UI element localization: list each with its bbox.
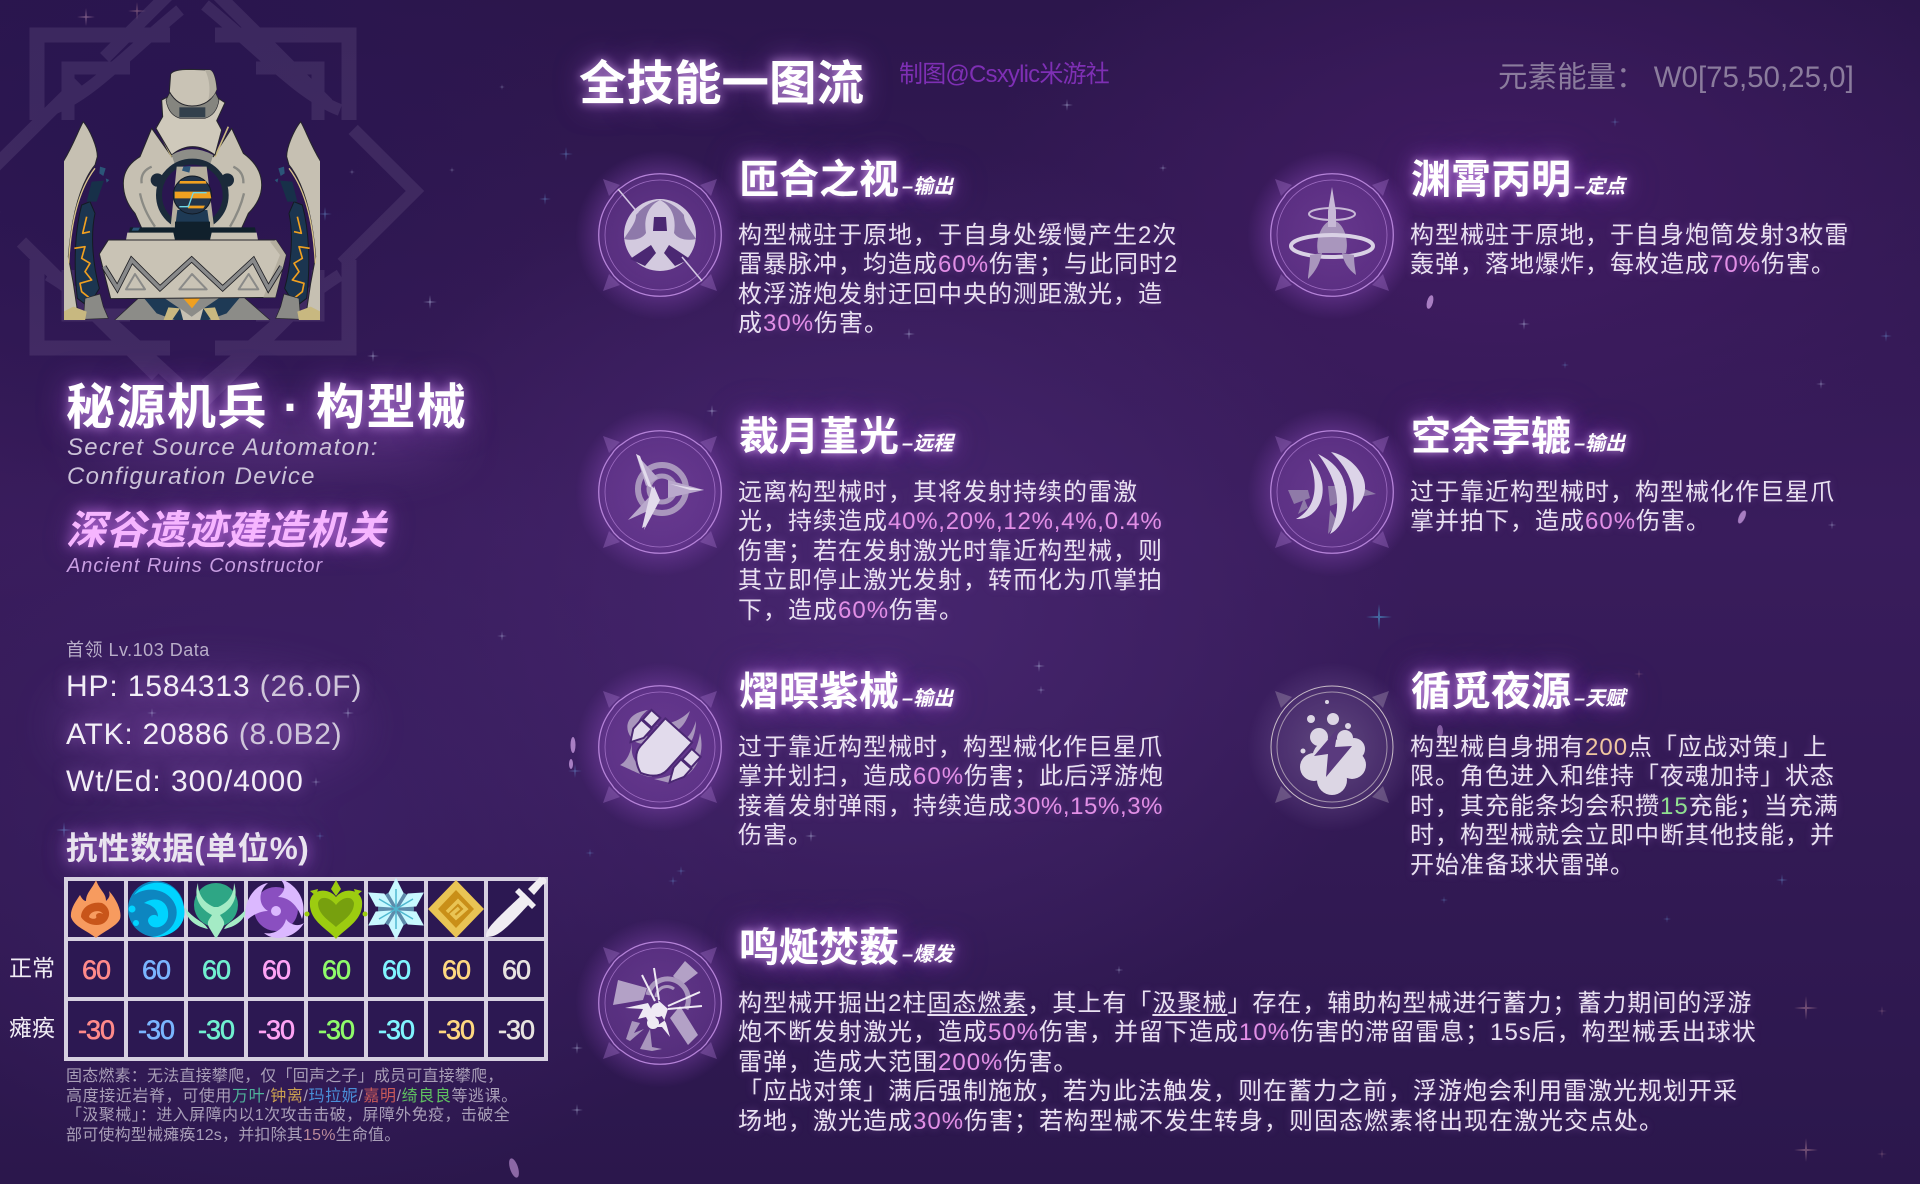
- skill description: 成30%伤害。: [738, 310, 889, 337]
- icon: anemo: [185, 883, 247, 939]
- resistance values: -30: [378, 1015, 414, 1045]
- skill name: 循觅夜源–天赋: [1411, 670, 1625, 714]
- footnote about fuel pillars: 固态燃素：无法直接攀爬，仅「回声之子」成员可直接攀爬，: [66, 1068, 503, 1085]
- boss portrait: configuration device: [64, 68, 320, 320]
- english boss name: Secret Source Automaton:: [67, 434, 379, 461]
- boss stats block: [64, 640, 542, 938]
- icon: skill 5: [1254, 157, 1410, 313]
- icon: physical sword: [486, 877, 546, 937]
- skill description: 接着发射弹雨，持续造成30%,15%,3%: [738, 793, 1163, 820]
- footnote about fuel pillars: 高度接近岩脊，可使用万叶/钟离/玛拉妮/嘉明/绮良良等逃课。: [66, 1088, 518, 1105]
- resistance values: -30: [438, 1015, 474, 1045]
- boss name heading: 秘源机兵 · 构型械: [66, 381, 468, 435]
- skill description: 伤害；若在发射激光时靠近构型械，则: [738, 538, 1163, 565]
- skill description: 掌并划扫，造成60%伤害；此后浮游炮: [738, 763, 1164, 790]
- weight and endurance: Wt/Ed: 300/4000: [66, 765, 304, 798]
- skill description: [1410, 222, 1849, 278]
- skill description: 时，其充能条均会积攒15充能；当充满: [1410, 793, 1839, 820]
- skill panel: 熠暝紫械: [582, 657, 1164, 849]
- soft nebula patches: [60, 410, 460, 866]
- hp: HP: 1584313 (26.0F): [66, 670, 362, 703]
- resistance values: -30: [138, 1015, 174, 1045]
- skill panel: 匝合之视: [581, 146, 1382, 337]
- skill description: 构型械自身拥有200点「应战对策」上: [1410, 734, 1828, 761]
- skill panel: 裁月堇光: [582, 173, 1382, 778]
- author credit: 制图@Csxylic米游社: [899, 61, 1109, 88]
- skill description: 过于靠近构型械时，构型械化作巨星爪: [738, 734, 1163, 761]
- icon: hydro: [128, 881, 184, 937]
- resistance values: 60: [142, 955, 170, 985]
- skill description: [738, 734, 1164, 849]
- skill name: 鸣烻焚薮–爆发: [739, 926, 953, 970]
- skill panel: 渊霄丙明: [1254, 144, 1849, 313]
- skill description: 光，持续造成40%,20%,12%,4%,0.4%: [738, 508, 1162, 535]
- resistance values: -30: [198, 1015, 234, 1045]
- icon: dendro: [304, 880, 368, 939]
- neck and head: [156, 95, 225, 155]
- resistance values: 60: [262, 955, 290, 985]
- resistance values: 60: [502, 955, 530, 985]
- skill description: 轰弹，落地爆炸，每枚造成70%伤害。: [1410, 251, 1836, 278]
- skill description: 远离构型械时，其将发射持续的雷激: [738, 479, 1138, 506]
- base collar: [127, 222, 257, 240]
- skill panel: 循觅夜源: [1262, 659, 1902, 859]
- icon: cryo: [369, 879, 423, 939]
- skill description: 伤害。: [738, 822, 813, 849]
- row label: normal: 正常: [9, 955, 55, 981]
- central ring: [172, 149, 213, 165]
- resistance values: 60: [382, 955, 410, 985]
- english boss name: [67, 434, 379, 490]
- skill name: 渊霄丙明–定点: [1411, 158, 1625, 202]
- atk: ATK: 20886 (8.0B2): [66, 718, 342, 751]
- row label: paralyzed: 瘫痪: [9, 1015, 55, 1041]
- resistance values: 60: [322, 955, 350, 985]
- skill description: [738, 222, 1178, 337]
- main title: 全技能一图流: [579, 58, 864, 111]
- skill description: 构型械开掘出2柱固态燃素，其上有「汲聚械」存在，辅助构型械进行蓄力；蓄力期间的浮游: [738, 990, 1752, 1017]
- skill description: 掌并拍下，造成60%伤害。: [1410, 508, 1711, 535]
- icon: skill 1: [581, 156, 1368, 313]
- icon: skill 6: [1254, 414, 1410, 570]
- resistance table: [64, 877, 548, 1061]
- boss subtitle: 深谷遗迹建造机关: [66, 509, 386, 553]
- icon: skill 2: [582, 414, 737, 569]
- skill name: 匝合之视–输出: [739, 158, 953, 202]
- skill description: [1410, 478, 1835, 537]
- icon: skill 4: [581, 925, 739, 1082]
- english subtitle: Ancient Ruins Constructor: [67, 555, 323, 577]
- skill description: 炮不断发射激光，造成50%伤害，并留下造成10%伤害的滞留雷息；15s后，构型械丢出球状: [738, 1019, 1757, 1046]
- resistance values: 60: [202, 955, 230, 985]
- elemental energy note: 元素能量： W0[75,50,25,0]: [1498, 61, 1854, 94]
- lower base: [114, 297, 271, 321]
- resistance values: -30: [498, 1015, 534, 1045]
- resistance values: 60: [82, 955, 110, 985]
- skill description: 雷弹，造成大范围200%伤害。: [738, 1049, 1078, 1076]
- skill description: 构型械驻于原地，于自身炮筒发射3枚雷: [1410, 222, 1849, 249]
- skill description: 时，构型械就会立即中断其他技能，并: [1410, 822, 1835, 849]
- resistance values: 60: [442, 955, 470, 985]
- resistance values: [78, 955, 534, 1045]
- skill description: 场地，激光造成30%伤害；若构型械不发生转身，则固态燃素将出现在激光交点处。: [738, 1108, 1664, 1135]
- footnote about fuel pillars: 「汲聚械」：进入屏障内以1次攻击击破，屏障外免疫，击破全: [66, 1107, 510, 1124]
- skill panel: 空余孛辘: [1254, 402, 1835, 804]
- skill name: 裁月堇光–远程: [739, 415, 953, 459]
- skill description: 限。角色进入和维持「夜魂加持」状态: [1410, 763, 1835, 790]
- skill name: 空余孛辘–输出: [1411, 415, 1625, 459]
- skill description: 开始准备球状雷弹。: [1410, 852, 1635, 879]
- icon: geo: [428, 880, 484, 938]
- skill description: [1410, 733, 1839, 880]
- icon: skill 3: [582, 670, 738, 824]
- skill name: 熠暝紫械–输出: [739, 670, 953, 714]
- icon: talent: [1262, 677, 1402, 817]
- skill description: [738, 479, 1163, 624]
- skill panel: 鸣烻焚薮: [581, 913, 1757, 1135]
- resistance values: -30: [78, 1015, 114, 1045]
- skill description: 其立即停止激光发射，转而化为爪掌拍: [738, 567, 1163, 594]
- footnote about fuel pillars: 部可使构型械瘫痪12s，并扣除其15%生命值。: [66, 1127, 400, 1144]
- body shoulders: [123, 128, 262, 232]
- english boss name: Configuration Device: [67, 463, 316, 490]
- skill description: 过于靠近构型械时，构型械化作巨星爪: [1410, 479, 1835, 506]
- skill description: 「应战对策」满后强制施放，若为此法触发，则在蓄力之前，浮游炮会利用雷激光规划开采: [738, 1078, 1738, 1105]
- icon: pyro: [71, 880, 121, 938]
- stats label: 首领 Lv.103 Data: [66, 640, 210, 660]
- resistance values: -30: [318, 1015, 354, 1045]
- resistance values: -30: [258, 1015, 294, 1045]
- skill description: [738, 989, 1757, 1135]
- skill description: 下，造成60%伤害。: [738, 597, 964, 624]
- resistance heading: 抗性数据(单位%): [66, 830, 309, 866]
- skill description: 枚浮游炮发射迂回中央的测距激光，造: [738, 281, 1163, 308]
- skill description: 雷暴脉冲，均造成60%伤害；与此同时2: [738, 251, 1178, 278]
- skill description: 构型械驻于原地，于自身处缓慢产生2次: [738, 222, 1177, 249]
- footnote about fuel pillars: [66, 1067, 518, 1144]
- icon: electro: [245, 879, 304, 938]
- pedestal: [99, 240, 286, 299]
